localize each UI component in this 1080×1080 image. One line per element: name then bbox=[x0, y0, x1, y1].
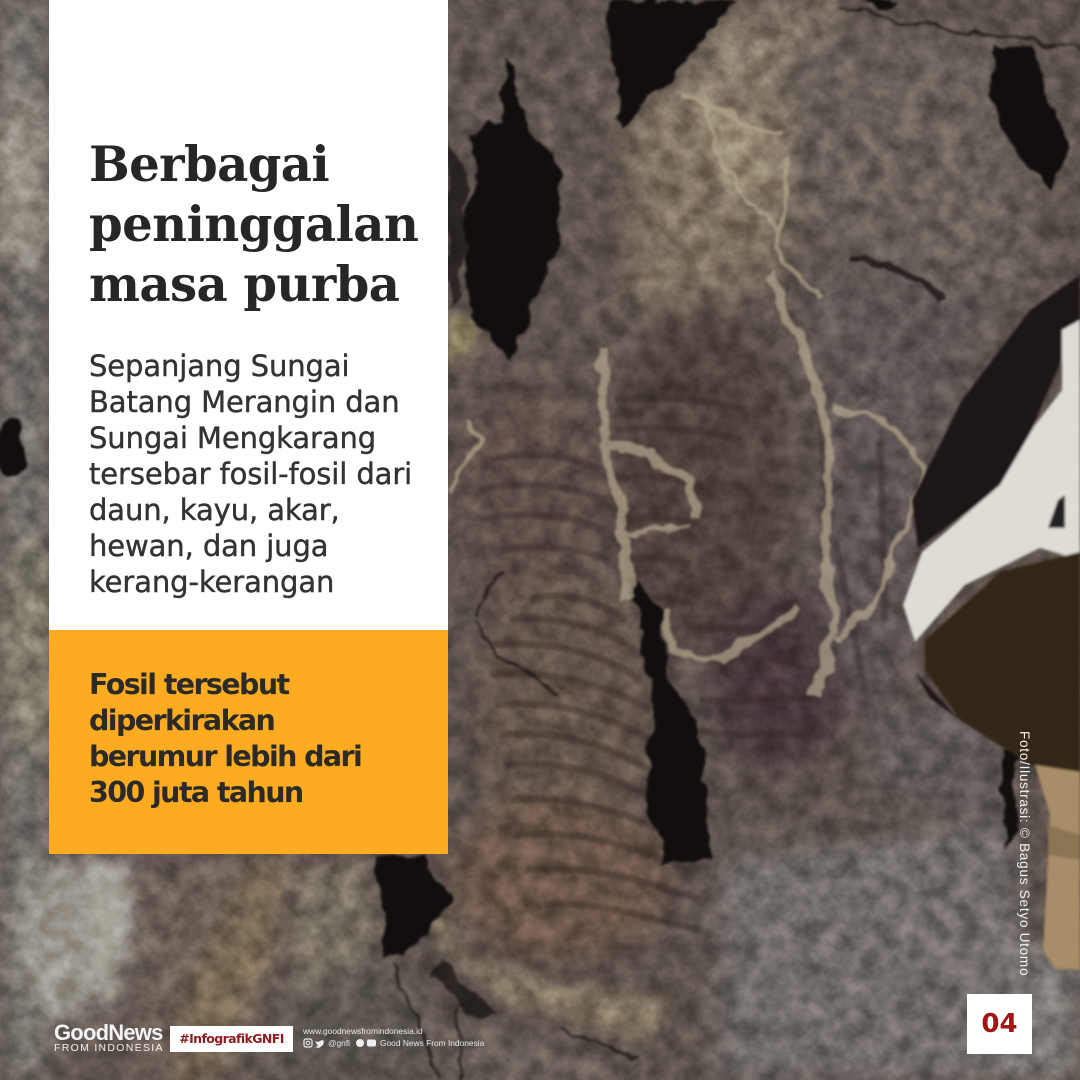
hiker bbox=[903, 275, 1080, 970]
description text: daun, kayu, akar, bbox=[89, 493, 340, 527]
footer: logo: GoodNews bbox=[54, 1020, 162, 1045]
page number box bbox=[967, 994, 1032, 1054]
description text: hewan, dan juga bbox=[89, 529, 328, 563]
description text: tersebar fosil-fosil dari bbox=[89, 457, 412, 491]
callout text bbox=[89, 668, 361, 809]
white text panel bbox=[49, 0, 448, 630]
description text: Sepanjang Sungai bbox=[89, 349, 349, 383]
description text: kerang-kerangan bbox=[89, 565, 334, 599]
callout text: 300 juta tahun bbox=[89, 776, 303, 809]
footer: website and social links: @gnfi bbox=[328, 1038, 350, 1048]
footer: website and social links: www.goodnewsfromindonesia.id bbox=[303, 1026, 423, 1036]
callout text: berumur lebih dari bbox=[89, 740, 361, 773]
title: masa purba bbox=[89, 257, 399, 313]
page number box: 04 bbox=[981, 1009, 1018, 1039]
footer: website and social links bbox=[303, 1026, 484, 1048]
pale mineral veins bbox=[450, 95, 925, 700]
description text: Sungai Mengkarang bbox=[89, 421, 376, 455]
description text bbox=[89, 349, 412, 599]
callout text: Fosil tersebut bbox=[89, 668, 289, 701]
description text: Batang Merangin dan bbox=[89, 385, 399, 419]
footer: logo: FROM INDONESIA bbox=[54, 1042, 164, 1054]
title bbox=[89, 137, 418, 313]
orange callout panel bbox=[49, 630, 448, 854]
callout text: diperkirakan bbox=[89, 704, 274, 737]
title: peninggalan bbox=[89, 197, 418, 253]
social icons bbox=[303, 1038, 376, 1048]
title: Berbagai bbox=[89, 137, 329, 193]
footer: website and social links: Good News From Indonesia bbox=[380, 1038, 484, 1048]
footer: hashtag badge bbox=[170, 1026, 293, 1052]
footer: hashtag badge: #InfografikGNFI bbox=[179, 1031, 284, 1046]
photo credit: Foto/Ilustrasi: © Bagus Setyo Utomo bbox=[1017, 731, 1032, 976]
dark ribs of fossil bbox=[480, 398, 885, 930]
